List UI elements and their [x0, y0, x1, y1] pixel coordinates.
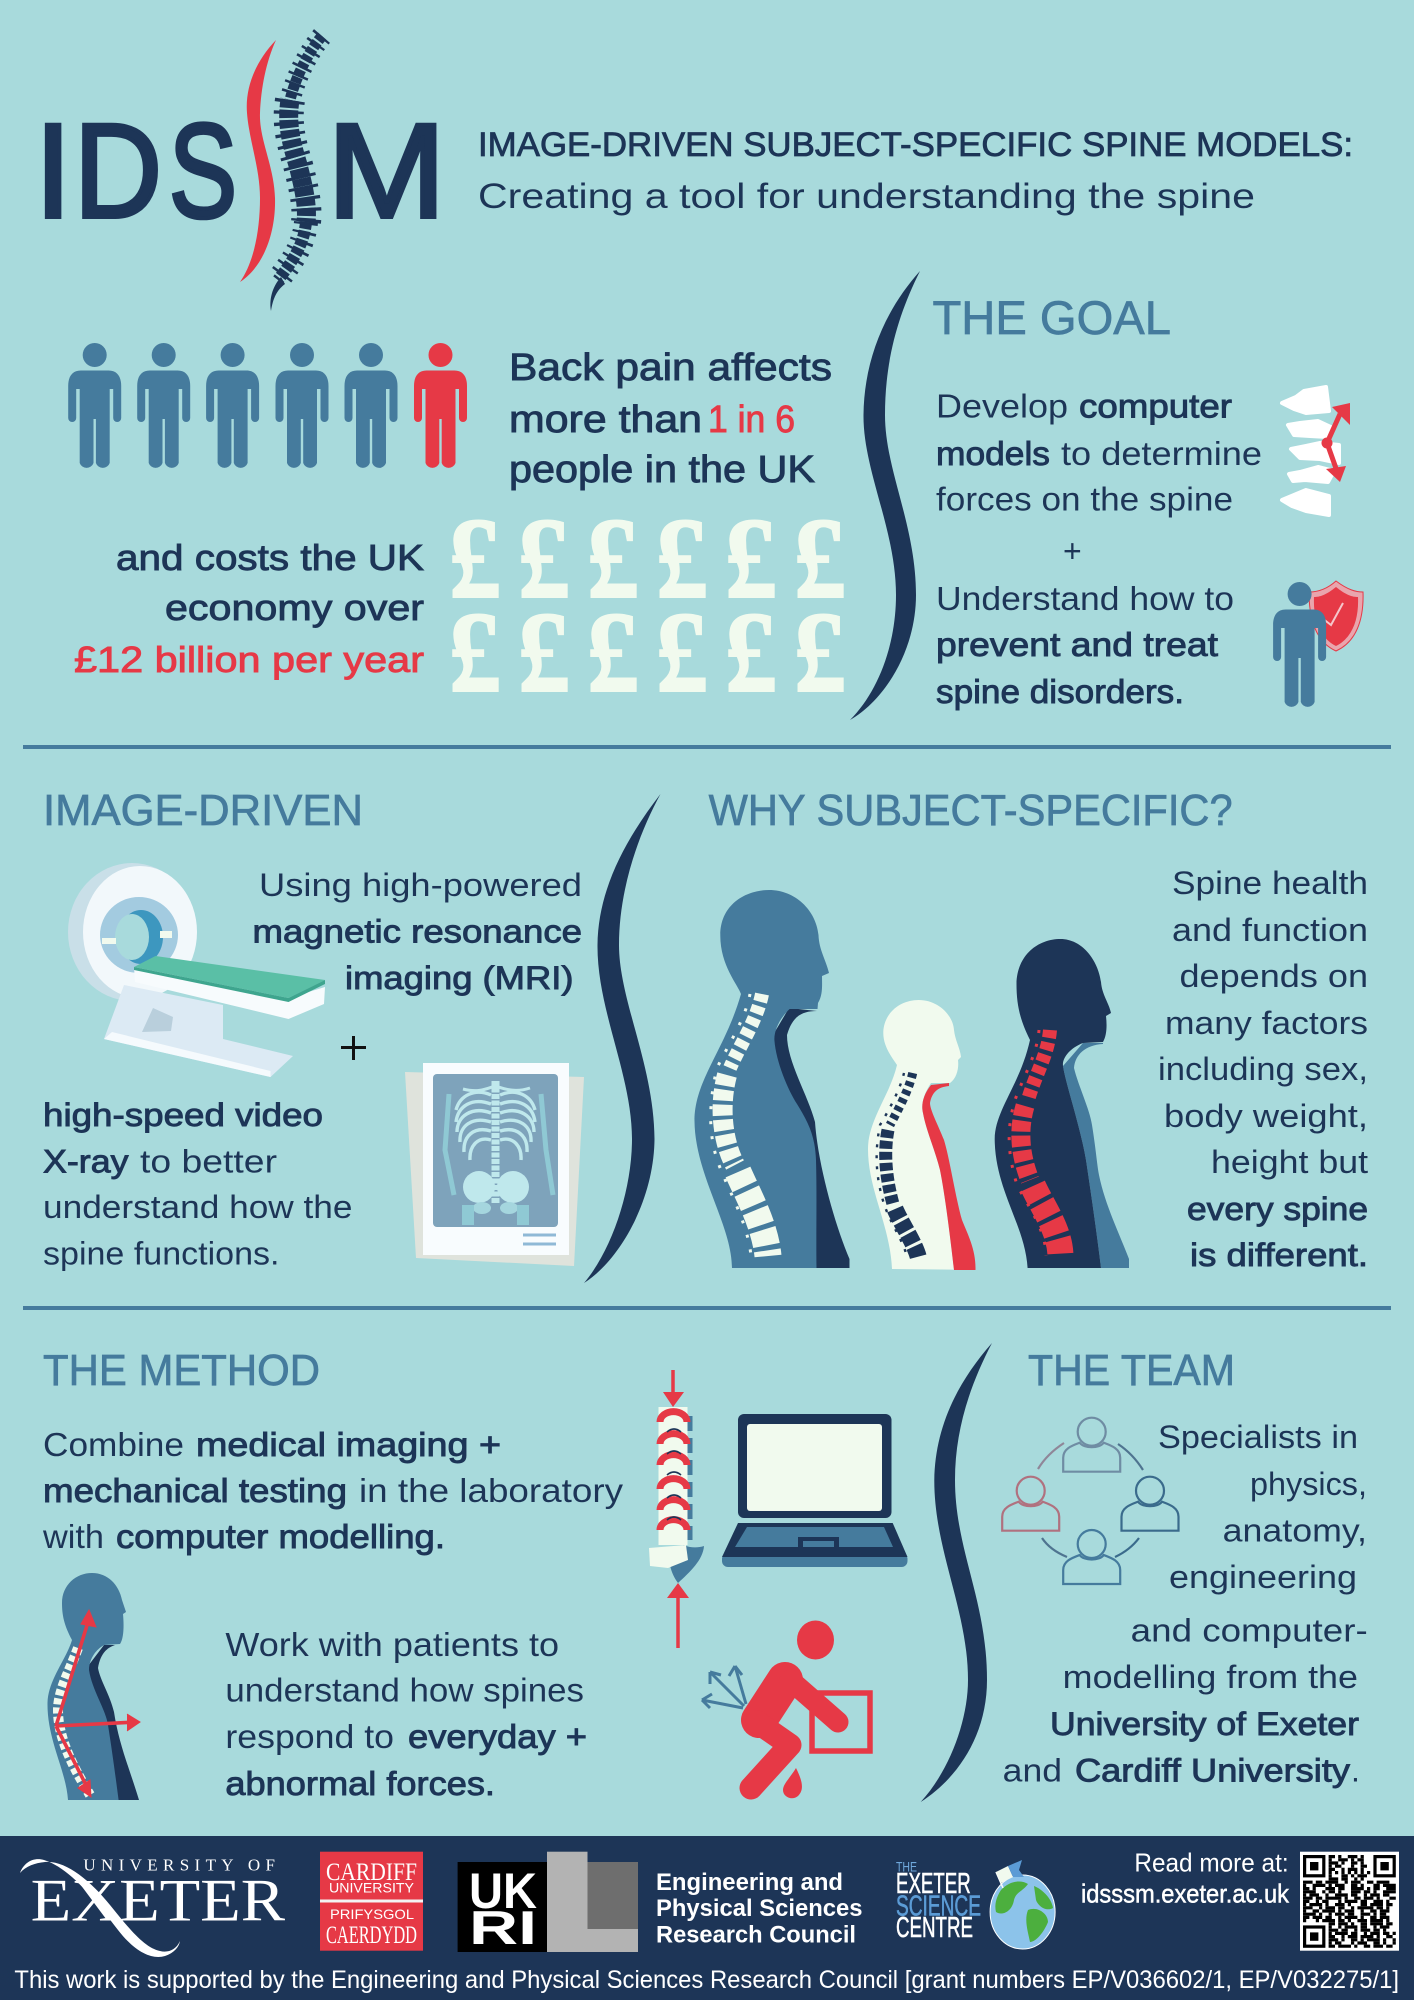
team text: engineering	[1169, 1559, 1357, 1595]
pound signs: £	[725, 495, 777, 623]
MRI description: imaging (MRI)	[345, 960, 574, 996]
spine-curve divider: bottom	[921, 1343, 992, 1802]
method text: medical imaging +	[196, 1426, 501, 1463]
logo: Exeter Science Centre	[896, 1859, 1055, 1949]
logo: Cardiff University: UNIVERSITY	[329, 1880, 415, 1896]
goal text: to determine	[1061, 435, 1262, 472]
economic cost statistic: £12 billion per year	[74, 639, 424, 680]
method text: computer modelling.	[116, 1518, 445, 1555]
goal text: models	[936, 435, 1050, 472]
economic cost statistic	[74, 537, 424, 680]
pound signs: £	[794, 495, 846, 623]
logo: Cardiff University: PRIFYSGOL	[330, 1906, 414, 1922]
spine: off-white vertebrae	[711, 994, 768, 1256]
spine-curve divider: top	[850, 271, 920, 720]
icon: spine under load with arrows	[649, 1370, 704, 1648]
goal text: +	[1063, 533, 1082, 569]
team text	[1003, 1419, 1368, 1789]
funder name: Engineering and	[656, 1869, 843, 1896]
logo: University of Exeter: EXETER	[31, 1868, 285, 1934]
read more text: idsssm.exeter.ac.uk	[1081, 1879, 1290, 1909]
heading: why subject-specific: WHY SUBJECT-SPECIFIC?	[709, 786, 1233, 835]
goal text: Develop	[936, 388, 1068, 424]
method text: mechanical testing	[43, 1472, 347, 1509]
economic cost statistic: economy over	[165, 587, 424, 628]
logo: UKRI EPSRC: UK	[469, 1863, 537, 1919]
funder name	[656, 1869, 862, 1949]
divider line	[23, 1306, 1391, 1310]
icon: MRI scanner	[68, 863, 325, 1077]
subject-specific text: many factors	[1165, 1005, 1368, 1041]
MRI description: Using high-powered	[259, 867, 582, 903]
subject-specific text: every spine	[1187, 1191, 1368, 1227]
team text: Specialists in	[1158, 1419, 1358, 1455]
heading: the method: THE METHOD	[43, 1346, 320, 1395]
QR finder patterns	[1305, 1857, 1394, 1946]
icon: globe with flag	[990, 1860, 1055, 1949]
icon: X-ray film	[405, 1063, 584, 1266]
logo letter I: I	[34, 97, 72, 246]
logo letter M: M	[327, 97, 446, 246]
logo: Cardiff University: CARDIFF	[326, 1859, 417, 1886]
panel: image-driven	[43, 786, 584, 1272]
heading: the goal: THE GOAL	[932, 291, 1171, 344]
back pain statistic: more than	[509, 399, 702, 441]
panel: the goal	[932, 291, 1363, 710]
back pain statistic: 1 in 6	[708, 399, 795, 441]
logo letter S: S	[169, 97, 237, 246]
team text: and computer-	[1131, 1613, 1368, 1649]
figure: patient with spine force arrows	[47, 1573, 140, 1800]
read more text	[1081, 1848, 1290, 1909]
pictogram: one in six people	[68, 343, 467, 468]
team text: University of Exeter	[1050, 1706, 1359, 1742]
subject-specific text: and function	[1172, 912, 1368, 948]
method text: with	[42, 1518, 104, 1555]
icon: vertebrae with force arrows	[1282, 387, 1350, 515]
logo: University of Exeter	[20, 1856, 285, 1957]
logo: Exeter Science Centre: CENTRE	[896, 1912, 973, 1944]
logo: University of Exeter: UNIVERSITY OF	[83, 1856, 275, 1875]
goal text: Understand how to	[936, 580, 1234, 617]
pound signs: £	[656, 495, 708, 623]
subject-specific text: is different.	[1190, 1237, 1368, 1273]
funder name: Research Council	[656, 1922, 856, 1949]
pound signs: £	[725, 589, 777, 717]
pound signs: £	[656, 589, 708, 717]
economic cost statistic: and costs the UK	[116, 537, 424, 578]
X-ray description: to better	[140, 1144, 277, 1180]
pound signs: £	[449, 495, 501, 623]
goal text: prevent and treat	[936, 626, 1218, 663]
subtitle: Creating a tool for understanding the spine	[478, 177, 1255, 216]
subject-specific text: height but	[1211, 1144, 1368, 1180]
spine: navy vertebrae	[877, 1073, 919, 1259]
subject-specific text: Spine health	[1172, 865, 1368, 901]
back pain statistic: people in the UK	[509, 449, 815, 491]
X-ray description: understand how the	[43, 1189, 352, 1225]
work with patients text: Work with patients to	[225, 1626, 559, 1663]
heading: image-driven: IMAGE-DRIVEN	[43, 786, 363, 835]
work with patients text: respond to	[225, 1718, 394, 1755]
pound signs: £	[794, 589, 846, 717]
MRI description	[252, 867, 582, 996]
X-ray description: X-ray	[43, 1144, 128, 1180]
heading: the team: THE TEAM	[1028, 1346, 1235, 1395]
pound signs: £	[518, 495, 570, 623]
logo spine vertebrae	[270, 36, 322, 311]
subject-specific text: body weight,	[1164, 1098, 1368, 1134]
goal text: forces on the spine	[936, 480, 1233, 518]
title	[478, 126, 1353, 216]
X-ray description: high-speed video	[43, 1097, 323, 1133]
method text: Combine	[43, 1426, 184, 1463]
X-ray description: spine functions.	[43, 1236, 280, 1272]
icon: person lifting a box	[702, 1620, 870, 1798]
team text: physics,	[1250, 1466, 1367, 1502]
spine-curve divider: middle	[584, 794, 660, 1283]
team text: and	[1003, 1753, 1062, 1789]
back pain statistic: Back pain affects	[509, 347, 832, 389]
back pain statistic	[509, 347, 832, 491]
icon: person with shield	[1273, 581, 1363, 707]
logo: Exeter Science Centre: SCIENCE	[896, 1891, 981, 1923]
figure: small off-white profile	[868, 1000, 976, 1270]
team text: Cardiff University	[1075, 1753, 1350, 1789]
spine: red vertebrae	[1009, 1030, 1060, 1256]
funder name: Physical Sciences	[656, 1895, 862, 1922]
QR code	[1300, 1852, 1399, 1951]
logo letter D: D	[74, 97, 162, 246]
pound signs	[449, 495, 846, 717]
team text: anatomy,	[1223, 1513, 1367, 1549]
logo red spinal curve	[240, 40, 276, 282]
logo: UKRI EPSRC: RI	[469, 1901, 537, 1954]
X-ray description	[43, 1097, 352, 1272]
pound signs: £	[449, 589, 501, 717]
pound signs: £	[518, 589, 570, 717]
work with patients text	[225, 1626, 587, 1802]
title: IMAGE-DRIVEN SUBJECT-SPECIFIC SPINE MODELS:	[478, 126, 1353, 164]
figure: tall blue profile	[694, 890, 850, 1268]
logo: UKRI EPSRC	[458, 1852, 638, 1954]
goal text: spine disorders.	[936, 673, 1184, 710]
work with patients text: understand how spines	[225, 1672, 584, 1709]
logo: IDSSM	[34, 36, 446, 311]
figure: navy profile	[995, 939, 1129, 1268]
plus sign	[341, 1036, 366, 1060]
logo: Exeter Science Centre: THE	[896, 1859, 917, 1875]
pound signs: £	[587, 495, 639, 623]
divider line	[23, 745, 1391, 749]
logo: Exeter Science Centre: EXETER	[896, 1868, 971, 1900]
read more text: Read more at:	[1134, 1848, 1289, 1878]
icon: laptop	[722, 1414, 908, 1567]
panel: why subject-specific	[694, 786, 1368, 1273]
work with patients text: everyday +	[408, 1718, 587, 1755]
logo: Cardiff University: CAERDYDD	[326, 1922, 417, 1949]
MRI description: magnetic resonance	[252, 914, 582, 950]
icon: team circle	[1002, 1418, 1178, 1584]
panel: the method	[42, 1346, 908, 1802]
team text: modelling from the	[1063, 1659, 1358, 1695]
subject-specific text: depends on	[1180, 958, 1368, 994]
work with patients text: abnormal forces.	[225, 1765, 495, 1802]
subject-specific text	[1158, 865, 1368, 1273]
footer band	[0, 1836, 1414, 2000]
panel: the team	[1002, 1346, 1368, 1789]
method text	[42, 1426, 624, 1555]
team text: .	[1351, 1753, 1360, 1789]
method text: in the laboratory	[359, 1472, 624, 1509]
goal text	[936, 388, 1262, 710]
goal text: computer	[1079, 388, 1232, 424]
pound signs: £	[587, 589, 639, 717]
logo: Cardiff University	[320, 1852, 423, 1951]
subject-specific text: including sex,	[1158, 1051, 1368, 1087]
